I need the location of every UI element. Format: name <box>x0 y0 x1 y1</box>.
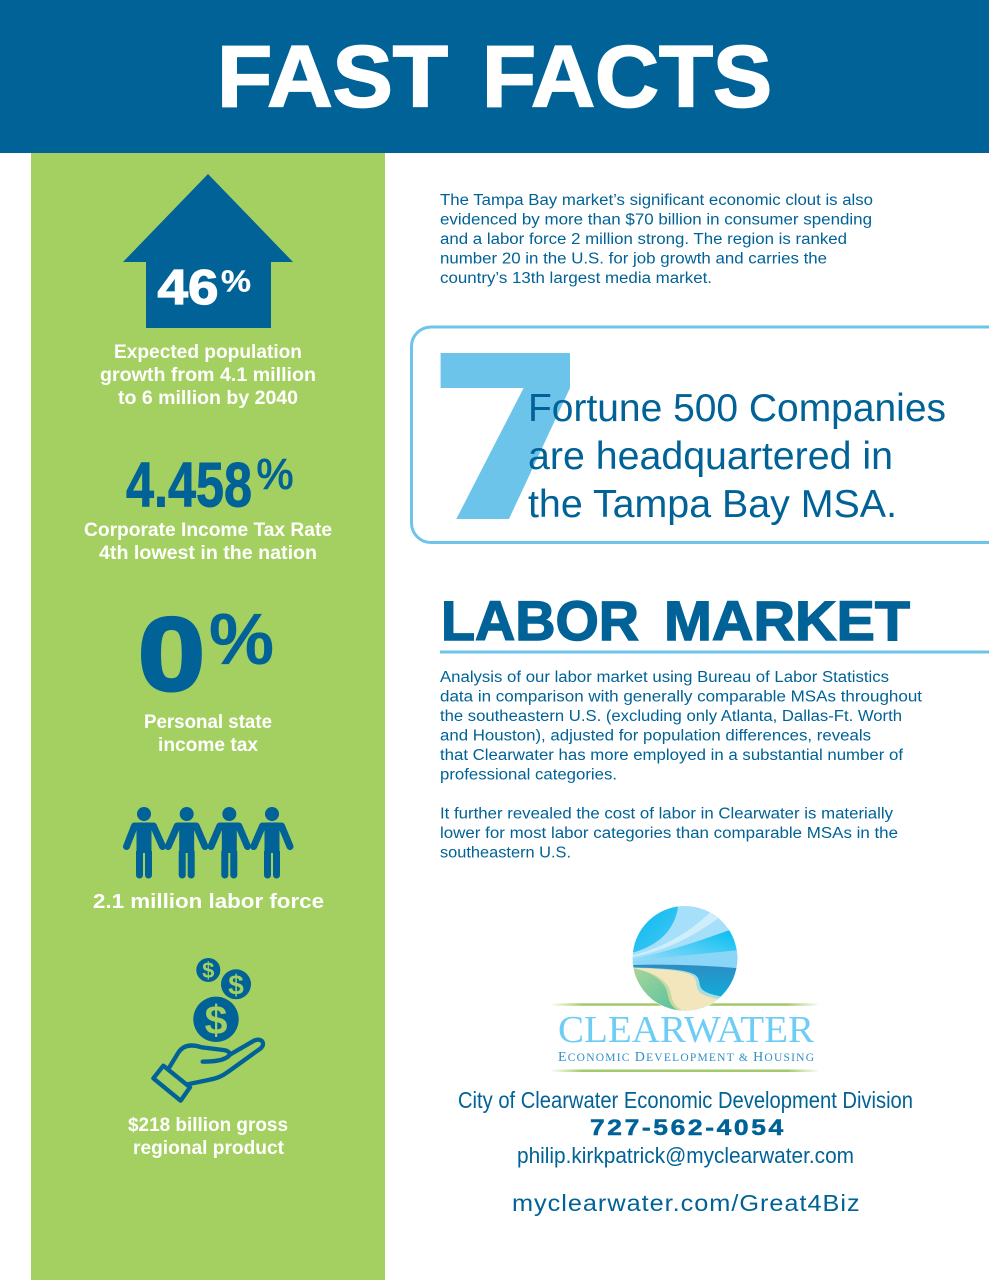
contact information: City of Clearwater Economic Development Division <box>458 1087 913 1113</box>
contact information: 727-562-4054 <box>590 1116 784 1140</box>
stat: personal income tax <box>138 597 274 756</box>
caption: personal tax: Personal state <box>144 712 272 733</box>
labor market text: data in comparison with generally comparable MSAs throughout <box>440 688 923 706</box>
value: 4.458%: 4.458 <box>126 450 252 520</box>
intro paragraph: The Tampa Bay market’s significant economic clout is also <box>440 192 873 209</box>
heading: labor market: MARKET <box>664 589 910 652</box>
value: 0%: 0 <box>138 597 205 713</box>
logo tagline: ECONOMIC DEVELOPMENT & HOUSING <box>558 1050 814 1065</box>
caption: corporate tax <box>84 520 332 564</box>
intro paragraph <box>440 192 873 287</box>
heading: labor market: LABOR <box>441 589 639 652</box>
labor market text <box>440 669 923 862</box>
value: 46%: 46 <box>158 261 218 315</box>
caption: population growth: Expected population <box>114 342 302 363</box>
panel: key statistics sidebar <box>31 153 385 1280</box>
caption: corporate tax: 4th lowest in the nation <box>99 543 317 564</box>
value: 0%: % <box>209 600 274 680</box>
caption: population growth: growth from 4.1 million <box>100 365 316 386</box>
caption: population growth: to 6 million by 2040 <box>118 388 298 409</box>
labor market text: southeastern U.S. <box>440 844 571 862</box>
value: 4.458%: % <box>256 451 294 499</box>
title <box>217 28 772 126</box>
value: 46% <box>158 261 251 315</box>
callout text: Fortune 500 Companies <box>528 387 946 430</box>
caption: gross regional product <box>128 1115 288 1159</box>
callout: Fortune 500 companies <box>412 327 989 542</box>
labor market text: Analysis of our labor market using Bureau of Labor Statistics <box>440 669 889 686</box>
icon: up arrow <box>123 174 293 328</box>
callout text <box>528 387 946 526</box>
contact information: philip.kirkpatrick@myclearwater.com <box>517 1143 854 1168</box>
caption: gross regional product: regional product <box>133 1138 285 1159</box>
caption: population growth <box>100 342 316 409</box>
callout text: are headquartered in <box>528 435 893 478</box>
caption: personal tax <box>144 712 272 756</box>
stat: 46% population growth <box>100 174 316 409</box>
title: FAST <box>217 28 448 126</box>
intro paragraph: number 20 in the U.S. for job growth and carries the <box>440 250 827 268</box>
labor market text: It further revealed the cost of labor in Clearwater is materially <box>440 806 893 822</box>
heading: labor market <box>440 589 989 654</box>
labor market text: that Clearwater has more employed in a substantial number of <box>440 747 904 764</box>
icon: four people holding hands <box>126 807 290 879</box>
caption: corporate tax: Corporate Income Tax Rate <box>84 520 332 541</box>
contact information <box>458 1087 913 1217</box>
caption: labor force: 2.1 million labor force <box>93 891 324 913</box>
icon: hand with coins: $ <box>205 997 228 1043</box>
intro paragraph: country’s 13th largest media market. <box>440 270 712 287</box>
icon: hand with coins: $ <box>228 970 244 1000</box>
icon: hand with coins: $ <box>202 958 214 983</box>
value: 0% <box>138 597 274 713</box>
icon: hand with coins <box>153 958 263 1101</box>
labor market text: and Houston), adjusted for population differences, reveals <box>440 728 871 744</box>
labor market text: professional categories. <box>440 766 617 784</box>
intro paragraph: evidenced by more than $70 billion in consumer spending <box>440 212 872 228</box>
labor market text: the southeastern U.S. (excluding only Atlanta, Dallas-Ft. Worth <box>440 708 902 725</box>
value: 46%: % <box>221 264 251 298</box>
stat: corporate income tax <box>84 450 332 564</box>
header band <box>0 0 989 153</box>
caption: personal tax: income tax <box>158 735 258 756</box>
title: FACTS <box>482 28 772 126</box>
logo wordmark: CLEARWATER <box>558 1009 815 1051</box>
labor market text: lower for most labor categories than comparable MSAs in the <box>440 825 898 842</box>
big numeral 7 <box>441 353 570 519</box>
stat: gross regional product <box>128 958 288 1159</box>
logo: Clearwater Economic Development & Housing <box>550 903 820 1072</box>
callout text: the Tampa Bay MSA. <box>528 483 897 526</box>
stat: labor force <box>93 807 324 913</box>
caption: gross regional product: $218 billion gross <box>128 1115 288 1136</box>
intro paragraph: and a labor force 2 million strong. The region is ranked <box>440 231 847 248</box>
contact information: myclearwater.com/Great4Biz <box>512 1191 860 1217</box>
logo emblem <box>632 906 738 1011</box>
